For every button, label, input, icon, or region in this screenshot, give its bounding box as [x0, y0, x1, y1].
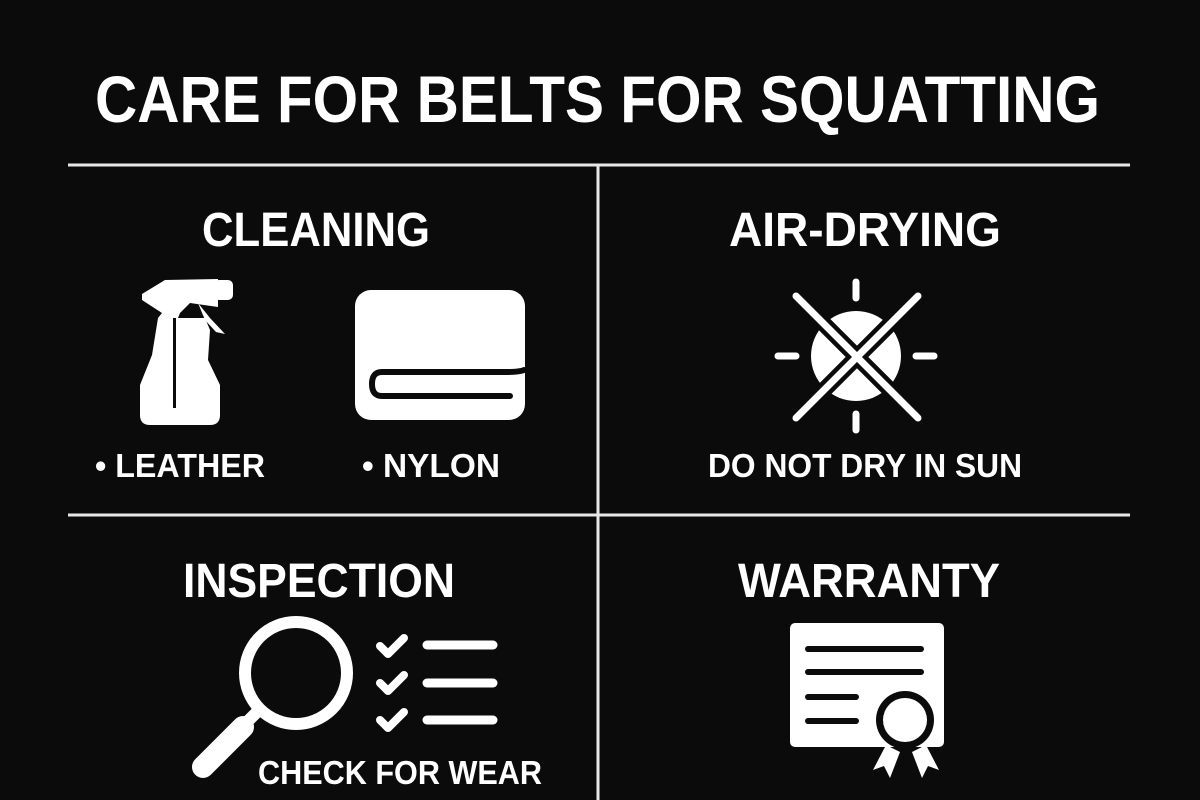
icon: spray bottle	[140, 279, 233, 425]
panel: cleaning	[95, 204, 525, 484]
panel: air-drying	[708, 204, 1022, 484]
heading: air-drying: AIR-DRYING	[729, 204, 1001, 257]
icon: certificate	[790, 623, 944, 778]
label: leather: • LEATHER	[95, 447, 265, 484]
heading: inspection: INSPECTION	[183, 555, 455, 608]
icon: magnifier	[203, 622, 347, 767]
panel: inspection	[183, 555, 542, 791]
heading: warranty: WARRANTY	[738, 555, 1000, 608]
icon: crossed sun	[778, 282, 934, 430]
label: check for wear: CHECK FOR WEAR	[258, 754, 542, 791]
icon: checklist	[380, 638, 493, 728]
label: nylon: • NYLON	[362, 447, 500, 484]
label: do not dry in sun: DO NOT DRY IN SUN	[708, 447, 1022, 484]
panel: warranty	[738, 555, 1000, 778]
title: CARE FOR BELTS FOR SQUATTING	[95, 62, 1100, 136]
icon: towel	[355, 290, 525, 420]
heading: cleaning: CLEANING	[202, 204, 430, 257]
